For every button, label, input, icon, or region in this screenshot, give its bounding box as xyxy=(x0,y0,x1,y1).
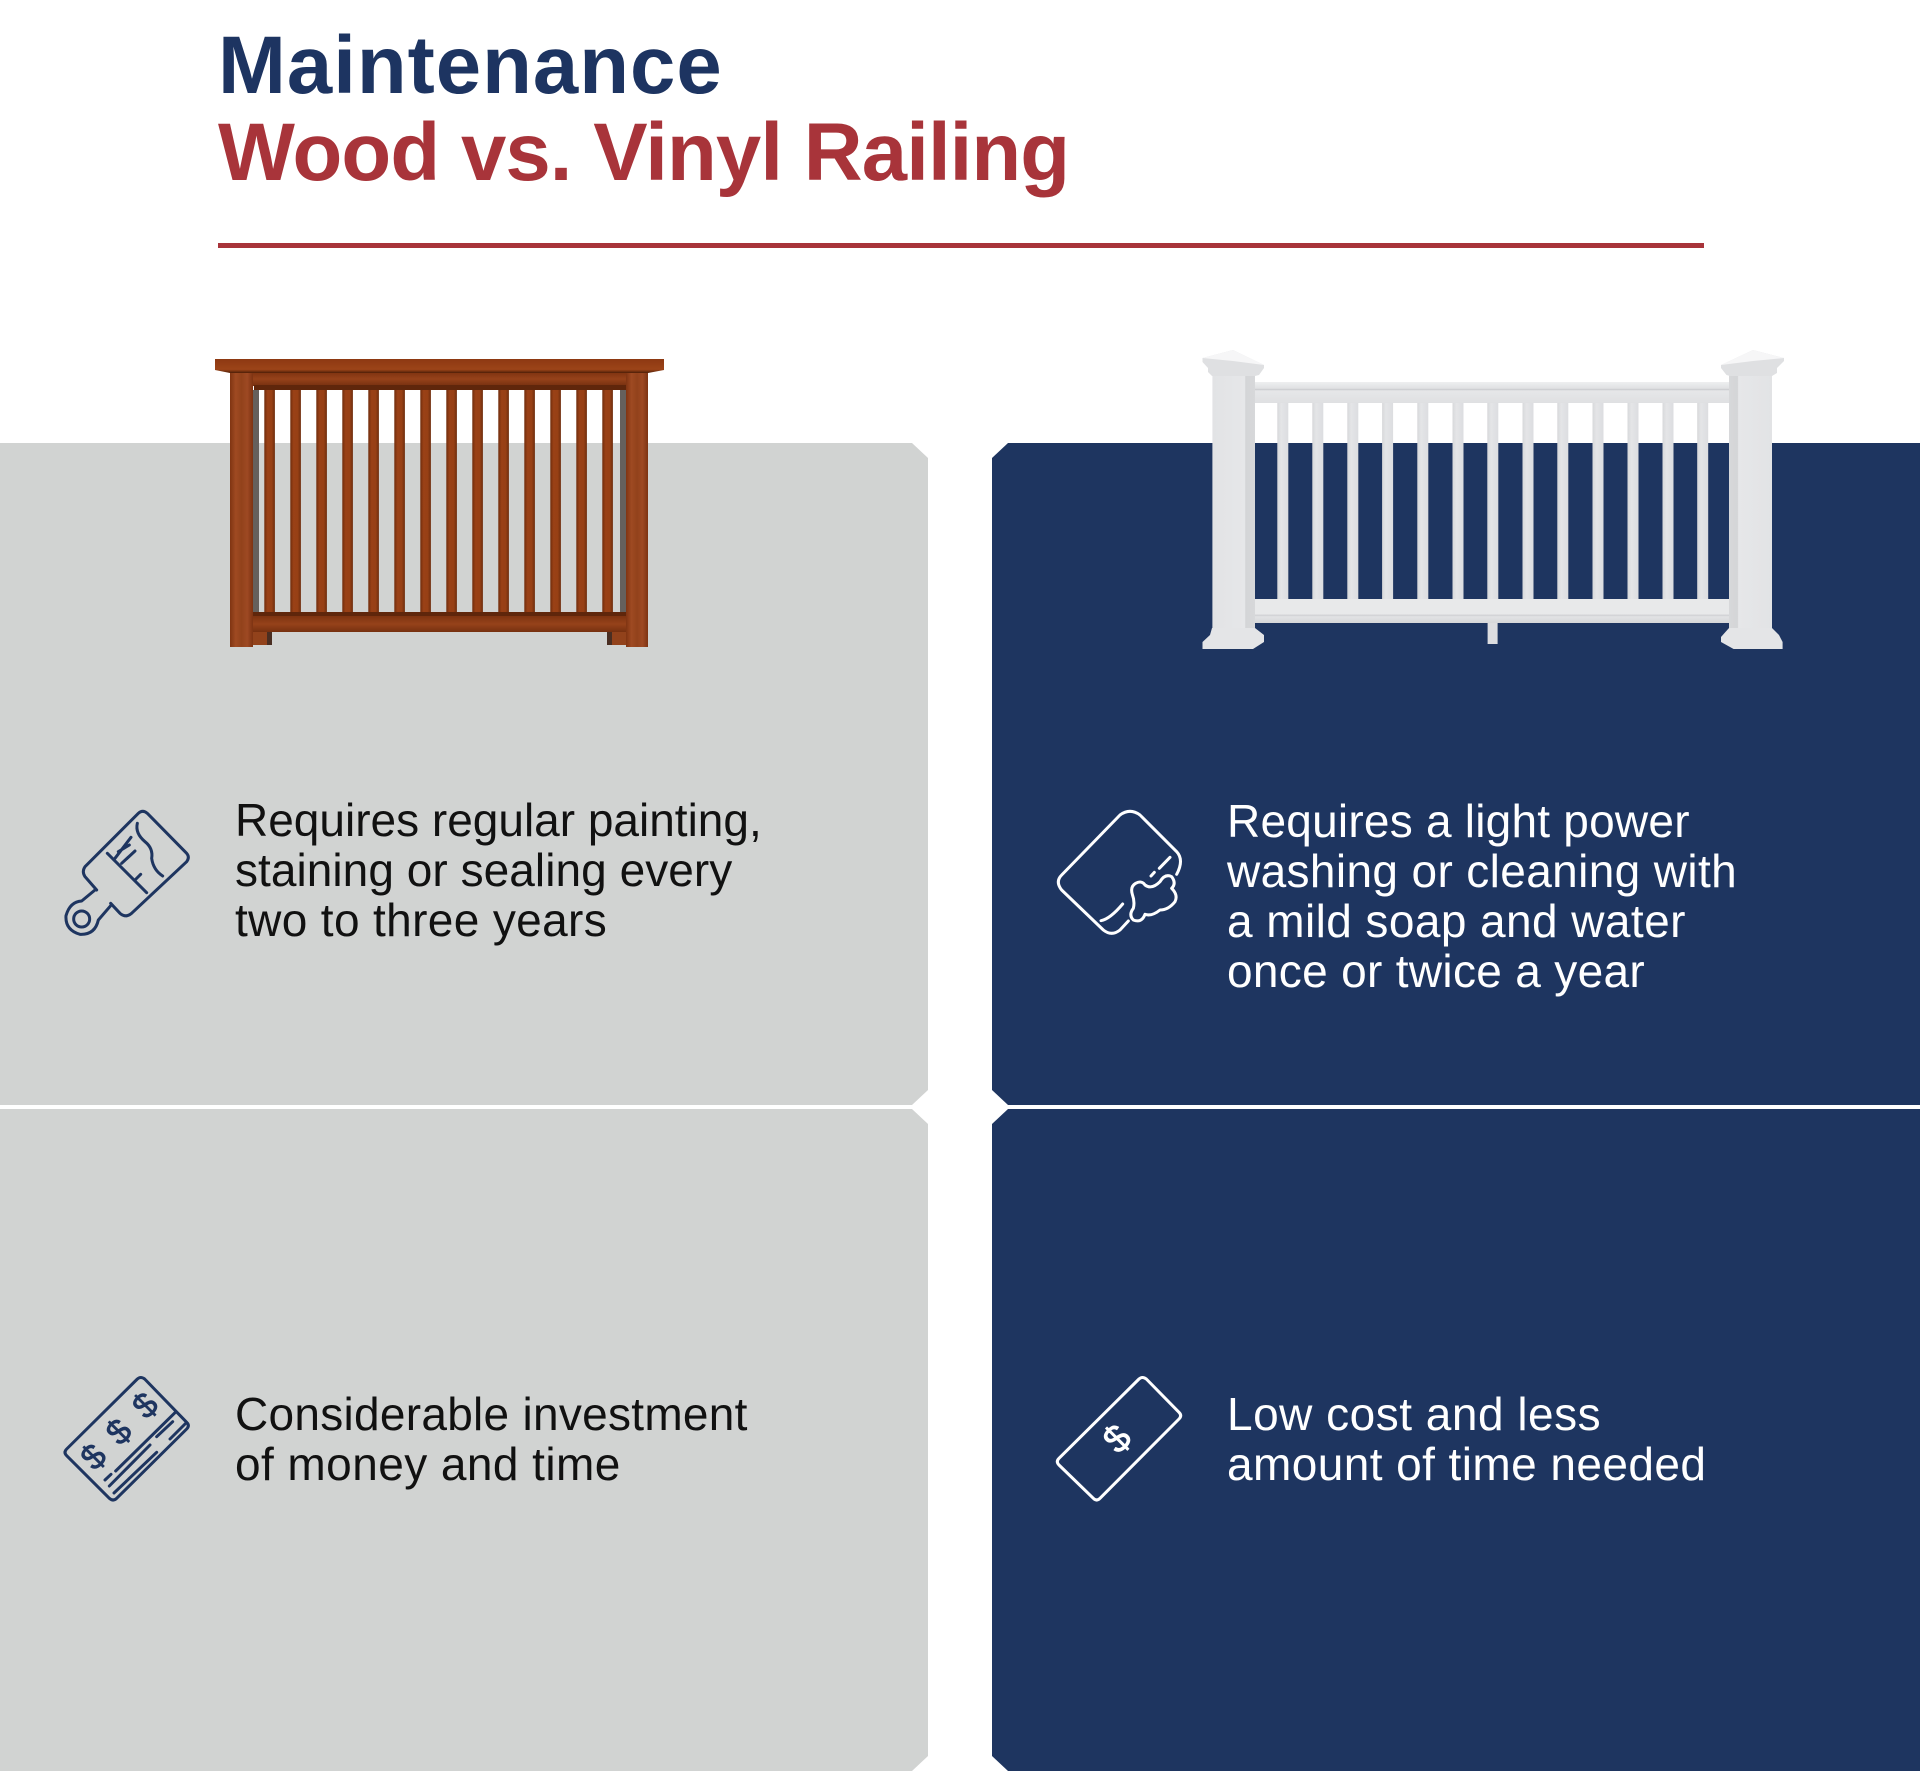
wood right post xyxy=(626,370,648,647)
wood post shadows xyxy=(253,390,259,612)
text: vinyl cost: amount of time needed xyxy=(1227,1438,1706,1490)
wood top rail xyxy=(253,372,626,386)
text: wood maintenance: two to three years xyxy=(235,894,607,946)
text: vinyl maintenance: a mild soap and water xyxy=(1227,895,1686,947)
text: wood maintenance: Requires regular painting, xyxy=(235,794,762,846)
icon: dollar bill: $ xyxy=(1095,1416,1140,1462)
vinyl center support xyxy=(1488,622,1498,644)
wood cap xyxy=(215,359,664,373)
title line: Wood vs. Vinyl Railing: Wood vs. Vinyl Railing xyxy=(218,107,1069,198)
text: vinyl maintenance: Requires a light power xyxy=(1227,795,1690,847)
text: vinyl maintenance xyxy=(1226,795,1737,997)
icon: soap and rag xyxy=(1056,810,1182,935)
title rule xyxy=(218,243,1704,248)
vinyl balusters xyxy=(1277,402,1708,601)
icon: stack of money xyxy=(63,1376,190,1502)
wood feet xyxy=(253,632,272,645)
panel: vinyl maintenance xyxy=(992,443,1920,1105)
panel: wood cost xyxy=(0,1109,928,1771)
text: wood cost: Considerable investment xyxy=(235,1388,748,1440)
text: wood cost xyxy=(235,1388,748,1490)
wood balusters xyxy=(264,388,613,614)
icon: stack of money: $ xyxy=(73,1436,114,1478)
railing illustrations xyxy=(215,350,1784,649)
icon: dollar bill xyxy=(1056,1376,1182,1502)
panel: wood maintenance xyxy=(0,443,928,1105)
wood railing xyxy=(215,359,664,647)
title xyxy=(218,20,1069,198)
vinyl railing xyxy=(1202,350,1784,649)
icon: stack of money: $ xyxy=(125,1385,166,1426)
text: vinyl cost: Low cost and less xyxy=(1227,1388,1601,1440)
text: wood maintenance: staining or sealing every xyxy=(235,844,732,896)
wood left post xyxy=(230,370,253,647)
icon: stack of money: $ xyxy=(98,1411,140,1453)
text: vinyl maintenance: washing or cleaning with xyxy=(1227,845,1737,897)
title line: Maintenance: Maintenance xyxy=(218,20,723,111)
vinyl right post xyxy=(1721,350,1784,649)
text: wood maintenance xyxy=(235,794,762,946)
icon: paint brush xyxy=(64,810,190,936)
vinyl bottom rail xyxy=(1249,599,1737,623)
text: vinyl cost xyxy=(1227,1388,1706,1490)
vinyl left post xyxy=(1202,350,1264,649)
vinyl top rail xyxy=(1249,382,1737,403)
panel: vinyl cost xyxy=(992,1109,1920,1771)
text: wood cost: of money and time xyxy=(235,1438,621,1490)
text: vinyl maintenance: once or twice a year xyxy=(1227,945,1645,997)
wood bottom rail xyxy=(253,612,626,617)
